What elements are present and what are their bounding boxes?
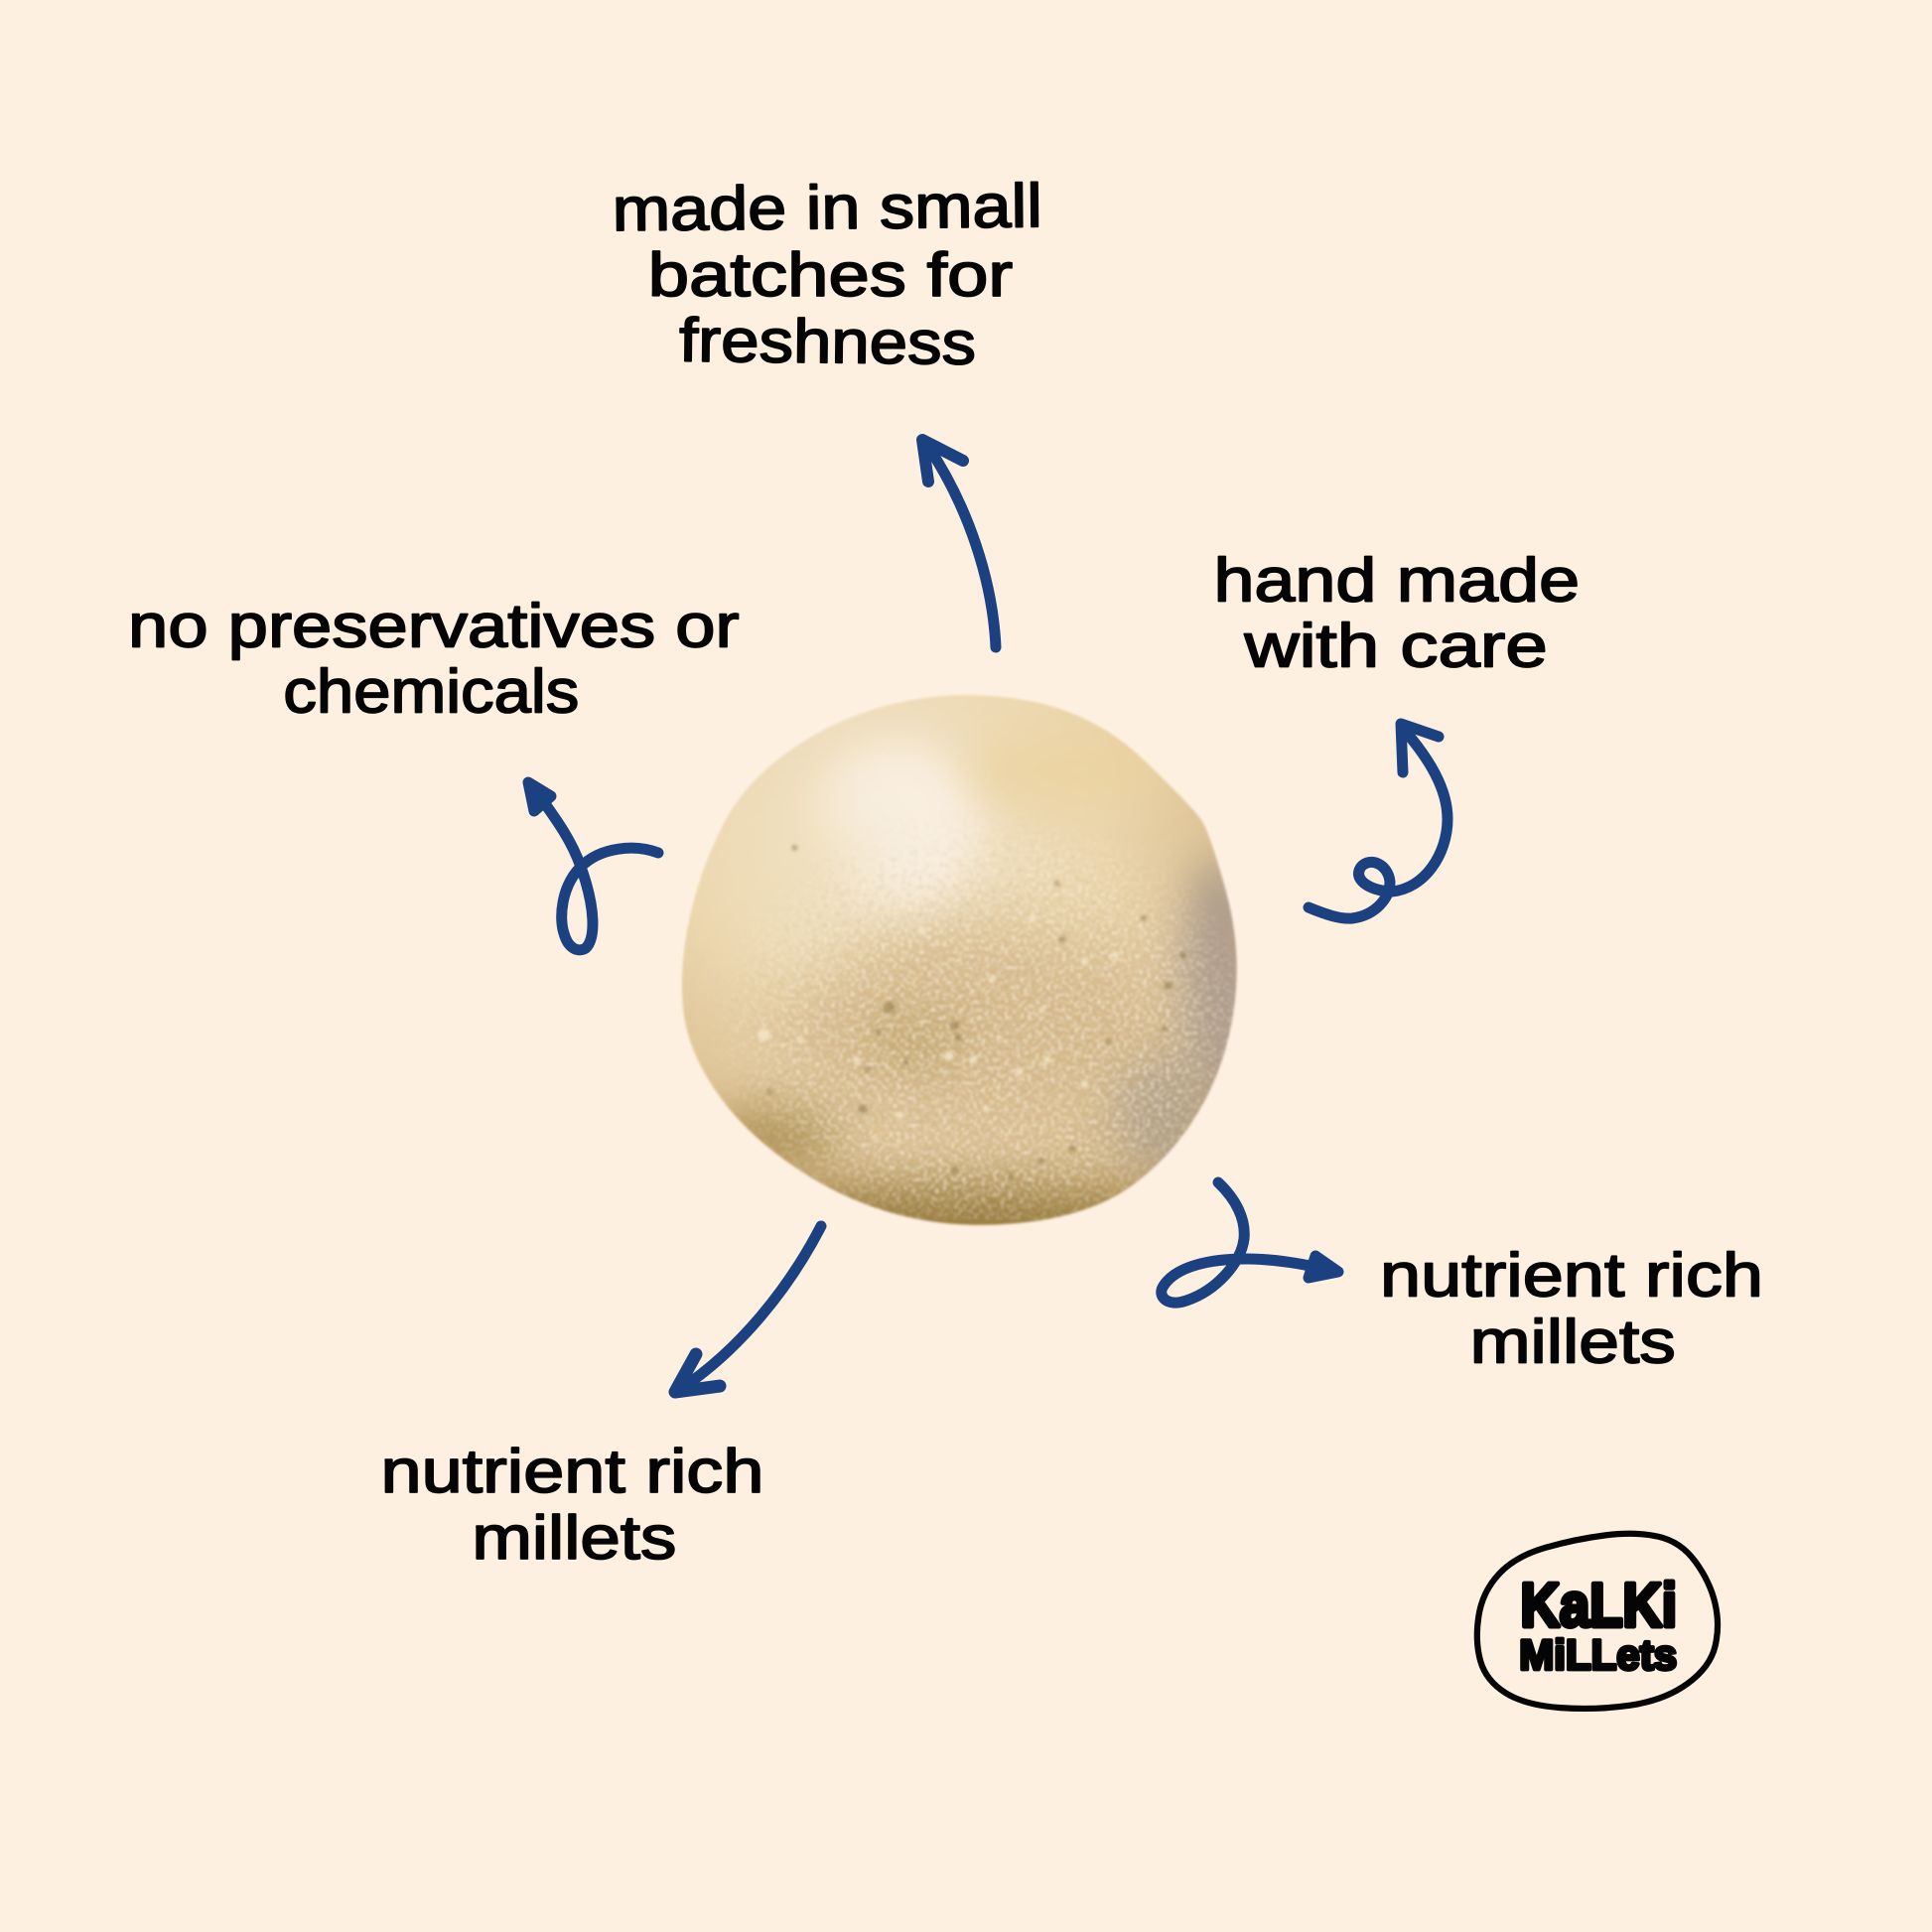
label: made in small batches for freshness — [612, 172, 1042, 378]
label: hand made with care — [1213, 547, 1580, 680]
label: no preservatives or chemicals: chemicals — [283, 657, 579, 726]
arrow: to lower-left millets label — [675, 1226, 821, 1392]
label: hand made with care: hand made — [1213, 547, 1580, 616]
logo outline — [1477, 1534, 1718, 1709]
infographic canvas — [131, 181, 1759, 1712]
logo wordmark: KaLKi — [1520, 1572, 1677, 1640]
label: nutrient rich millets (right) — [1380, 1242, 1763, 1377]
label: nutrient rich millets (left) — [380, 1438, 763, 1573]
label: no preservatives or chemicals — [128, 593, 740, 726]
label: hand made with care: with care — [1243, 612, 1548, 680]
label: nutrient rich millets (left): nutrient rich — [380, 1438, 763, 1506]
logo wordmark — [1519, 1572, 1677, 1679]
label: made in small batches for freshness: batches for — [648, 241, 1013, 310]
label: made in small batches for freshness: freshness — [679, 307, 976, 378]
millet ball photo — [681, 694, 1239, 1227]
label: nutrient rich millets (right): nutrient rich — [1380, 1242, 1763, 1311]
arrow: looped, to hand made label — [1309, 724, 1448, 918]
ball speckles — [767, 845, 1186, 1179]
label: no preservatives or chemicals: no preservatives or — [128, 593, 740, 661]
arrow: up to freshness label — [922, 440, 996, 647]
arrow: looped, to preservatives label — [528, 782, 658, 950]
logo: Kalki Millets — [1477, 1534, 1718, 1709]
logo wordmark: MiLLets — [1519, 1632, 1677, 1679]
label: nutrient rich millets (left): millets — [472, 1504, 676, 1573]
label: nutrient rich millets (right): millets — [1470, 1309, 1676, 1377]
label: made in small batches for freshness: made in small — [612, 172, 1042, 244]
arrow: looped, to lower-right millets label — [1162, 1182, 1338, 1303]
